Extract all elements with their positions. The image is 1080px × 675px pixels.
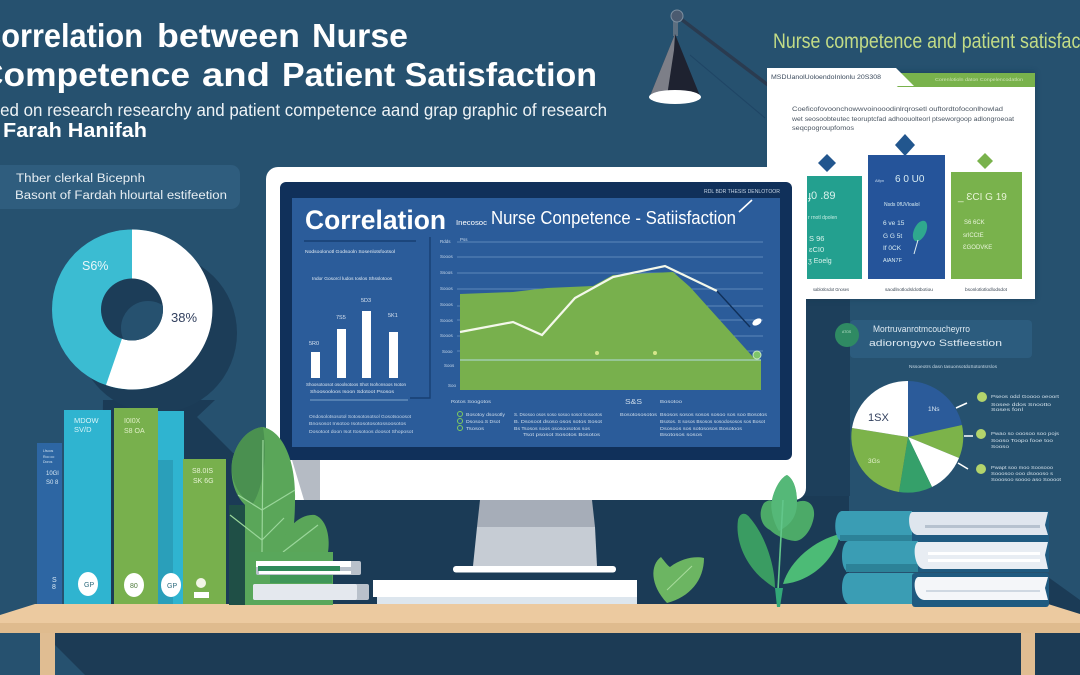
pie legend: Sooso (991, 444, 1010, 449)
keyboard (373, 580, 637, 606)
chart legend and notes: Dsosoo.S Dsot (466, 419, 501, 424)
book: cyan: MDOW (74, 416, 99, 425)
card captions: saodlnotlodsldotbotiou (885, 287, 934, 292)
chart legend and notes: Tsot psosot Sosotos Bosotos (523, 432, 601, 437)
book: blue: Lfsoos (43, 449, 54, 453)
card: blue: G G 5t (883, 233, 902, 240)
chart legend and notes: Bsotosos sosos (660, 432, 703, 437)
panel: right caption (835, 320, 1032, 358)
poster body text: seqcpogroupfomos (792, 125, 855, 132)
book: green: I0I0X (124, 418, 141, 425)
book: cyan small (158, 411, 184, 604)
book: green small (183, 459, 226, 604)
chart legend and notes: Tsosos (466, 426, 485, 431)
card: green: ƐGODVKE (963, 245, 992, 251)
chart legend and notes: S. Dsosoo osos soso sosoo sosot Sosootos (514, 412, 603, 417)
left bar panel: Indor Gosorcl ludos Ioslos Shsslotoos (312, 276, 393, 281)
poster body text: wet seosoobteutec teoruptcfad adhoouolteorl ptseworgoop adlongroeoat (791, 116, 1014, 123)
pie chart: 3Gs (868, 458, 881, 465)
author: Farah Hanifah (3, 120, 147, 142)
card: blue: If 0CK (883, 245, 902, 252)
chart legend and notes: Bosotoy dsosotly (466, 412, 506, 417)
icon: pen marker (751, 317, 763, 327)
pie legend: Pwao so ooosoo soo pojs (991, 431, 1060, 436)
card: teal: ɟ0 .89 (808, 190, 836, 202)
book: top (835, 511, 1049, 541)
book: blue: S (52, 577, 57, 584)
book: middle (842, 541, 1049, 572)
title: between (157, 17, 300, 54)
book: blue: S0 8 (46, 480, 59, 486)
book: cyan small: GP (167, 583, 177, 590)
area line chart: Sooos (440, 318, 454, 323)
chart legend and notes: B. Dsosoot dsoso osos sotos Sosot (514, 419, 603, 424)
card captions: bsonlotlotlodlodsdot (965, 287, 1008, 292)
card: teal: ʒ Eoelg (808, 258, 832, 265)
desk (0, 604, 1080, 675)
text box: left caption: Thber clerkal Bicepnh (16, 173, 145, 185)
card: green: _ ƐCI G 19 (957, 192, 1007, 203)
card: teal (807, 154, 862, 279)
card: teal: r rnotl dpolen (808, 215, 837, 221)
bar chart: 5K1 (388, 313, 398, 319)
bar chart (309, 298, 398, 378)
area line chart: Rdds (440, 239, 451, 244)
books right (835, 511, 1049, 607)
area line chart: Sooos (440, 333, 454, 338)
area line chart: Soo (448, 383, 457, 388)
card: blue: 6 ve 15 (883, 220, 905, 227)
card: blue: AlAN7F (883, 258, 903, 264)
pie legend: Pwapt soo moo Soosooo (991, 465, 1054, 470)
left bar panel: Shoosooloos Isoon Sdotoot Psosos (310, 389, 395, 394)
chart legend and notes: Bosotososotos (620, 412, 658, 417)
screen (292, 189, 780, 447)
plant left (229, 427, 343, 605)
text box: left caption: Basont of Fardah hlourtal estifeetion (15, 190, 227, 202)
left bar panel (304, 237, 430, 434)
poster header band: MSDUanolUoloendoInlonlu 20S308 (771, 75, 882, 81)
card: green: S6 6CK (964, 220, 985, 226)
book: blue: Roo oo (43, 455, 54, 459)
card: green: srlCCtE (963, 233, 984, 239)
book: green small: SK 6G (193, 478, 214, 485)
pie chart: 1Ns (928, 406, 940, 413)
left bar panel: Shoosotoosot osoolsotoos Shot Isohonsoos Isoton (306, 382, 406, 387)
card: blue: 6 0 U0 (895, 174, 925, 185)
book: cyan: GP (84, 582, 94, 589)
monitor stand (453, 500, 616, 572)
screen title: Inecosoc (456, 220, 488, 227)
chart legend and notes: Dsosoos sos sotososos Bosotoos (660, 426, 743, 431)
title (0, 17, 597, 93)
chart legend and notes: Bosotoo (660, 399, 683, 404)
left bar panel: Dosotoot doon Isot Itosotoos doosot Shoposot (309, 429, 414, 434)
small books left (253, 561, 369, 600)
panel: poster (767, 68, 1035, 299)
panel: right caption: adiorongyvo Sstfieestion (869, 338, 1002, 349)
pie chart: 1SX (868, 412, 889, 424)
card: green (951, 153, 1022, 279)
chart legend and notes: Rotos Soogotos (451, 399, 492, 404)
area line chart: Sooos (440, 254, 454, 259)
area line chart: Soos (444, 363, 455, 368)
card: blue: Nsds 0fUVloalol (884, 202, 920, 208)
bar chart: 5D3 (361, 298, 371, 304)
screen title: Correlation (305, 205, 446, 235)
pie chart (851, 381, 963, 493)
chart legend and notes: Bs Tsosos soos ososoosotos sos (514, 426, 591, 431)
pie legend: Sooosoo soooo aso Soooot (991, 477, 1062, 482)
book: cyan: SV/D (74, 425, 92, 434)
poster body text: Coeficofovoonchowwvoinooodinlrqrosetl ouftordtofoconlhowlad (792, 106, 1003, 113)
poster body text (791, 106, 1014, 132)
chart legend and notes: Bsotos. S sosos Bsosos sosodososos sos Bosot (660, 419, 766, 424)
book: blue: 8 (52, 584, 56, 591)
card: blue (868, 134, 945, 279)
book: blue (37, 443, 62, 604)
area line chart: Sooos (440, 302, 454, 307)
area line chart: Ssoos (440, 270, 453, 275)
card captions (813, 287, 1008, 292)
donut chart: S6% (82, 259, 108, 273)
pie legend: Soses fonl (991, 407, 1023, 412)
books left (37, 408, 226, 604)
left bar panel: Nodsoolonotl Godsooln Sosenlotsfootsol (305, 249, 395, 254)
donut chart: 38% (171, 310, 197, 325)
text box: left caption (0, 165, 240, 209)
icon: stethoscope (910, 218, 930, 254)
small leaf (653, 557, 704, 603)
book: green: S8 OA (124, 428, 145, 435)
donut chart (52, 229, 237, 413)
pie legend: Pseos odd Goooo oeoort (991, 394, 1060, 399)
left bar panel: Ondosolotsosotol Sotosotosotsol Gosotsooosot (309, 414, 412, 419)
area line chart: Pss (460, 237, 468, 242)
card: teal: S 96 (809, 234, 824, 243)
chart legend and notes: Bsosos sosos sosos sosoo sos soo Bosotos (660, 412, 768, 417)
screen title (305, 205, 736, 235)
pie legend: Sosee ddos Snootto (991, 402, 1052, 407)
bar chart: 5R0 (309, 341, 319, 347)
card: teal: ɛCI0 (809, 245, 824, 254)
title: Patient Satisfaction (282, 56, 597, 93)
card: blue: Alfpn (875, 178, 884, 183)
plant center (737, 475, 840, 607)
book: blue: 10Gl (46, 471, 59, 477)
area line chart: Sooo (442, 349, 453, 354)
chart legend and notes: S&S (625, 399, 642, 406)
pie legend: Sooso Toopo fooe too (991, 438, 1054, 443)
book: green: 80 (130, 583, 138, 590)
book: green (114, 408, 158, 604)
poster header band: Corenlotioln daton Conpelencodatlon (935, 77, 1024, 82)
monitor (266, 167, 806, 572)
poster header band (767, 68, 1035, 87)
pie legend: Sooosoo ooo dsoooso s (991, 471, 1054, 476)
area line chart: Sooos (440, 286, 454, 291)
book: bottom (842, 573, 1049, 607)
lamp (649, 10, 768, 118)
chart legend and notes (451, 399, 768, 437)
pie legend (956, 392, 1062, 482)
panel: right caption: Mortruvanrotmcoucheyrro (873, 324, 970, 335)
screen title: Nurse Conpetence - Satiisfaction (491, 207, 736, 228)
book: cyan (64, 410, 111, 604)
book: blue: Doros (43, 460, 53, 464)
area line chart (440, 237, 763, 390)
book: green small: S8.0IS (192, 468, 213, 475)
left bar panel: Bnososot Insotoo Isotosotosotossoosotos (309, 421, 407, 426)
title: Nurse (312, 17, 408, 54)
title: and (202, 56, 270, 93)
text: Nssoeotrs dasn tasuonsotdoSotontsrslos (909, 364, 998, 369)
screen top note: RDL BDR THESIS DENLOTOOR (704, 189, 780, 195)
bar chart: 7S5 (336, 315, 346, 321)
panel: right caption: ATOS (842, 330, 852, 334)
card captions: sablotlcsdot Gnoses (813, 287, 850, 292)
